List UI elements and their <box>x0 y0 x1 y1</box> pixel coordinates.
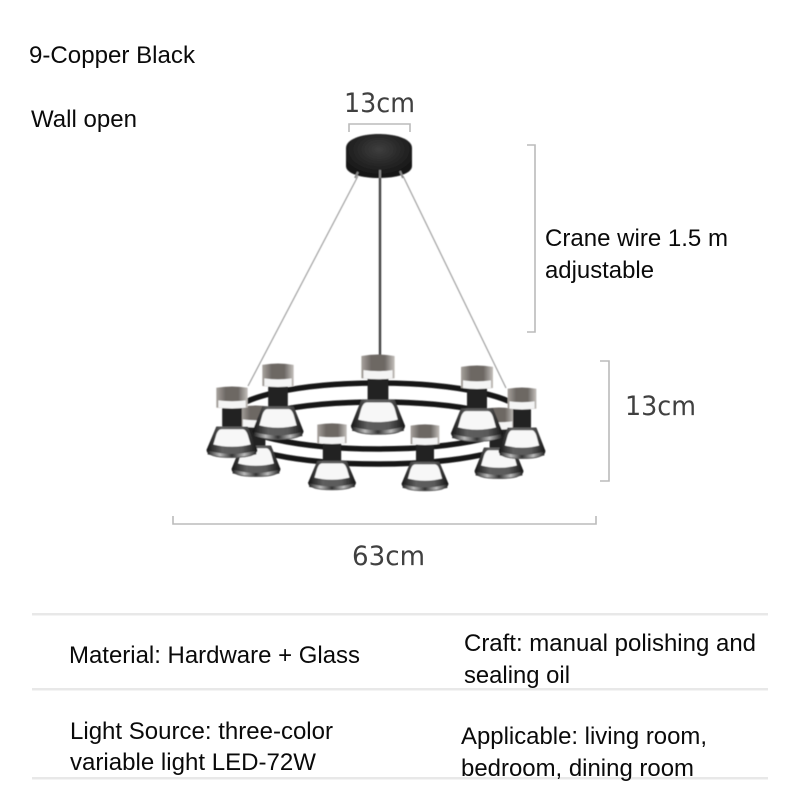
spec: applicable: Applicable: living room, <box>461 723 707 750</box>
dimension: canopy width 13cm <box>344 88 415 132</box>
centre back lamp <box>351 355 405 435</box>
label: crane wire: adjustable <box>545 257 654 284</box>
dimension: canopy width 13cm: 13cm <box>344 88 415 119</box>
spec: applicable <box>461 723 707 782</box>
chandelier illustration <box>207 134 545 491</box>
back left lamp <box>253 363 303 440</box>
spec: applicable: bedroom, dining room <box>461 755 694 782</box>
front middle left lamp <box>308 423 356 490</box>
spec: light source: variable light LED-72W <box>70 749 317 776</box>
label: crane wire: Crane wire 1.5 m <box>545 225 728 252</box>
dimension: height 13cm <box>600 361 696 481</box>
spec: craft: sealing oil <box>464 662 570 689</box>
spec: material: Material: Hardware + Glass <box>69 642 360 669</box>
double ring frame <box>232 383 524 464</box>
spec: craft <box>464 630 756 689</box>
dimension: diameter 63cm <box>173 516 596 572</box>
spec: light source <box>70 718 333 776</box>
dimension: wire length bracket <box>527 145 535 332</box>
label: crane wire <box>545 225 728 284</box>
right lamp <box>499 387 545 459</box>
suspension wires <box>248 176 506 388</box>
heading: 9-Copper Black: 9-Copper Black <box>29 42 196 69</box>
front middle right lamp <box>402 424 448 491</box>
ceiling canopy <box>346 134 412 178</box>
specification table <box>32 613 768 782</box>
spec: craft: Craft: manual polishing and <box>464 630 756 657</box>
label: Wall open: Wall open <box>31 106 137 133</box>
far left front lamp <box>232 405 280 477</box>
back right lamp <box>451 365 503 442</box>
dimension: diameter 63cm: 63cm <box>352 541 425 572</box>
spec: light source: Light Source: three-color <box>70 718 333 745</box>
dimension: height 13cm: 13cm <box>625 391 696 422</box>
left lamp <box>207 386 257 458</box>
far right front lamp <box>475 407 523 479</box>
